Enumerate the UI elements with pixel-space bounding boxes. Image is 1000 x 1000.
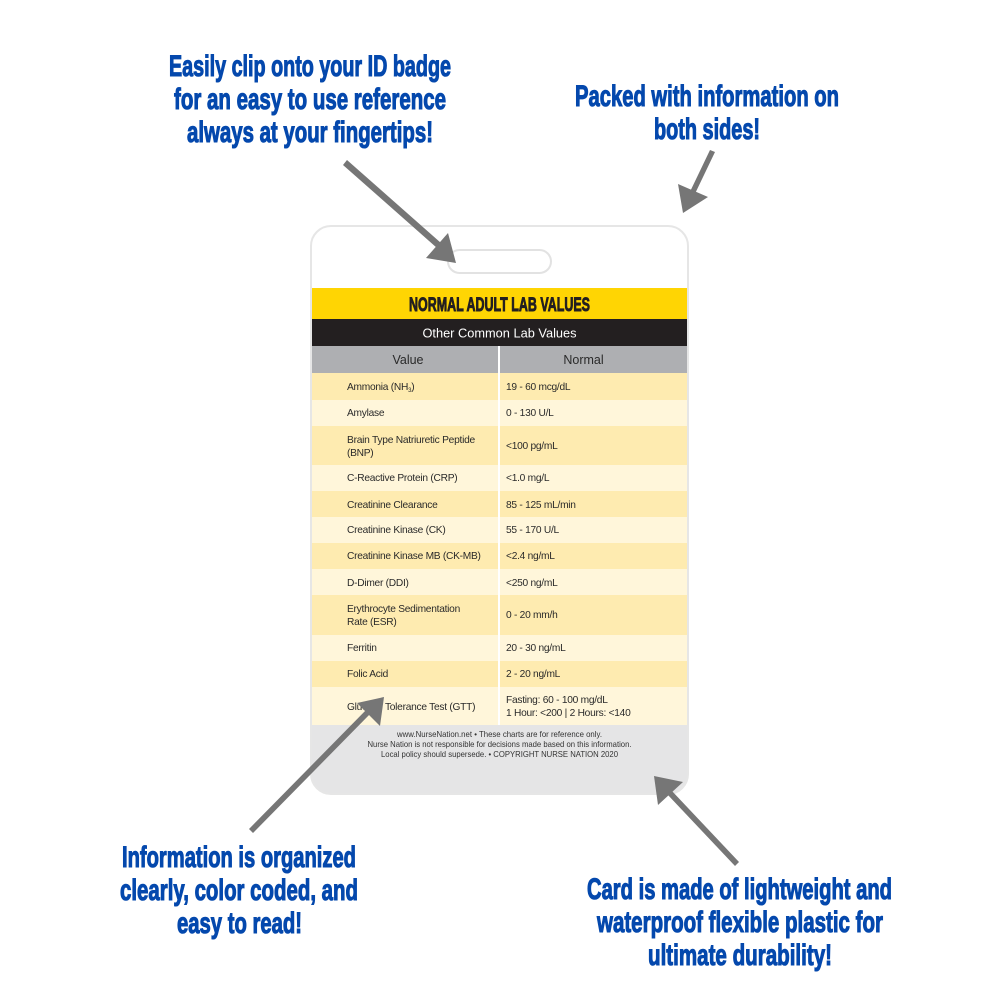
lab values table: ) — [411, 382, 414, 393]
badge clip slot — [448, 250, 551, 273]
lab values table: Creatinine Kinase MB (CK-MB) — [347, 551, 481, 562]
arrow: to table — [249, 697, 384, 833]
lab values table: Rate (ESR) — [347, 617, 396, 628]
lab values table: Brain Type Natriuretic Peptide — [347, 435, 476, 446]
callout: organized information: clearly, color coded, and — [120, 874, 358, 907]
lab values table: <250 ng/mL — [506, 578, 558, 589]
lab values table: 3 — [408, 388, 412, 394]
callout: organized information: easy to read! — [177, 907, 302, 940]
lab values table: 20 - 30 ng/mL — [506, 643, 566, 654]
card heading band — [311, 288, 688, 319]
arrow: to card corner — [678, 150, 715, 213]
lab values table: 2 - 20 ng/mL — [506, 669, 561, 680]
lab values table: Ferritin — [347, 643, 377, 654]
badge card — [311, 226, 688, 794]
card subheading band: Other Common Lab Values — [422, 326, 577, 340]
arrow: to clip slot — [343, 160, 456, 263]
card heading band: NORMAL ADULT LAB VALUES — [409, 295, 590, 316]
lab values table: Folic Acid — [347, 669, 389, 680]
footer disclaimer: www.NurseNation.net • These charts are for reference only. — [396, 729, 602, 739]
callout: clip onto badge: for an easy to use reference — [174, 83, 446, 116]
lab values table: <2.4 ng/mL — [506, 551, 555, 562]
lab values table: <100 pg/mL — [506, 441, 558, 452]
footer disclaimer: Nurse Nation is not responsible for decisions made based on this information. — [368, 739, 632, 749]
callout: durable plastic card: ultimate durability! — [648, 939, 832, 972]
table header: Normal — [563, 353, 604, 367]
lab values table: 0 - 20 mm/h — [506, 610, 558, 621]
lab values table: 0 - 130 U/L — [506, 408, 554, 419]
lab values table: 85 - 125 mL/min — [506, 500, 576, 511]
callout: organized information: Information is organized — [122, 841, 356, 874]
lab values table: Creatinine Kinase (CK) — [347, 525, 445, 536]
arrow: to card edge — [654, 776, 739, 866]
callout: durable plastic card — [587, 873, 892, 972]
lab values table: D-Dimer (DDI) — [347, 578, 409, 589]
lab values table: Fasting: 60 - 100 mg/dL — [506, 695, 608, 706]
lab values table: Erythrocyte Sedimentation — [347, 604, 460, 615]
lab values table: Glucose Tolerance Test (GTT) — [347, 702, 475, 713]
lab values table: 19 - 60 mcg/dL — [506, 382, 571, 393]
lab values table: <1.0 mg/L — [506, 473, 550, 484]
callout: packed with information: both sides! — [654, 113, 760, 146]
lab values table: (BNP) — [347, 448, 373, 459]
table header: Value — [392, 353, 424, 367]
callout: organized information — [120, 841, 358, 940]
callout: packed with information: Packed with information on — [575, 80, 839, 113]
lab values table: Ammonia (NH — [347, 382, 408, 393]
callout: clip onto badge: always at your fingertips! — [187, 116, 433, 149]
lab values table — [311, 346, 688, 725]
lab values table: 55 - 170 U/L — [506, 525, 560, 536]
footer disclaimer: Local policy should supersede. • COPYRIGHT NURSE NATION 2020 — [381, 749, 618, 759]
lab values table: Amylase — [347, 408, 385, 419]
callout: packed with information — [575, 80, 839, 146]
table header — [311, 346, 688, 373]
lab values table: 1 Hour: <200 | 2 Hours: <140 — [506, 708, 631, 719]
lab values table: C-Reactive Protein (CRP) — [347, 473, 457, 484]
callout: clip onto badge — [169, 50, 451, 149]
footer disclaimer — [311, 725, 688, 794]
callout: clip onto badge: Easily clip onto your ID badge — [169, 50, 451, 83]
card subheading band — [311, 319, 688, 346]
lab values table: Creatinine Clearance — [347, 500, 438, 511]
